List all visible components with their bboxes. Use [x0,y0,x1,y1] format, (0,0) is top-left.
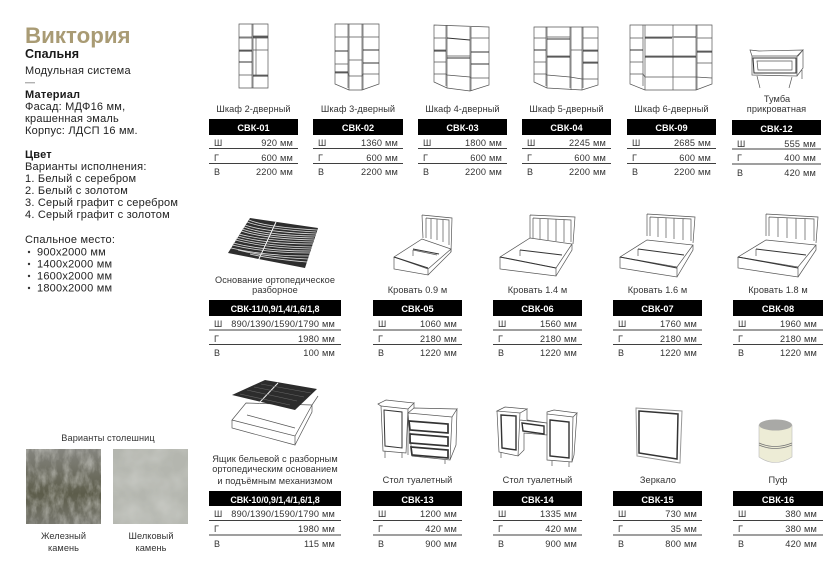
spec table: 1220 мм [420,348,457,358]
spec table: СВК-07 [641,304,674,314]
spec table: В [423,167,429,177]
spec table [613,300,702,358]
spec table: 420 мм [784,168,816,178]
caption: Кровать 1.6 м [628,285,687,295]
caption: Шкаф 5-дверный [529,104,604,114]
spec table: Ш [738,509,746,519]
product: wardrobe 3-door [313,24,403,177]
colour block: Цвет [25,149,52,161]
spec table [522,119,611,177]
spec table: Г [214,334,219,344]
product: orthopedic base: разборное [252,285,298,295]
spec table: 2180 мм [780,334,817,344]
spec table: В [498,348,504,358]
spec table: 2685 мм [674,138,711,148]
spec table: 1980 мм [298,524,335,534]
drawing: wardrobe 6-door [630,25,712,90]
material block: Корпус: ЛДСП 16 мм. [25,125,138,137]
drawing: mirror [636,408,682,463]
spec table: 600 мм [366,153,398,163]
product: storage box with lift mechanism [209,380,341,549]
sleeping place list: 1800x2000 мм [37,282,112,294]
spec table [733,300,823,358]
spec table: В [378,539,384,549]
product: wardrobe 2-door [209,24,298,177]
spec table: СВК-14 [521,495,554,505]
spec table: Ш [214,319,222,329]
spec table: 400 мм [784,153,816,163]
spec table: Г [423,153,428,163]
sleeping place list: 900x2000 мм [37,246,106,258]
spec table [732,120,821,178]
drawing: bed 1.8 [738,214,818,277]
spec table: Г [527,153,532,163]
spec table: Г [498,524,503,534]
caption: Стол туалетный [503,475,572,485]
swatch: iron stone [26,449,101,553]
spec table: Г [737,153,742,163]
spec table: Ш [378,319,386,329]
spec table [373,300,462,358]
spec table [627,119,716,177]
spec table: СВК-12 [760,124,793,134]
system type: Модульная система [25,65,131,77]
spec table: Ш [214,509,222,519]
product: bed 1.6 m [613,214,702,358]
spec table: СВК-03 [446,123,479,133]
drawing: pouf [759,420,792,462]
spec table: В [214,539,220,549]
sleeping place list: 1600x2000 мм [37,270,112,282]
spec table: Ш [618,509,626,519]
material block: Материал [25,89,80,101]
drawing: wardrobe 3-door [335,24,379,90]
colour block: 3. Серый графит с серебром [25,197,178,209]
spec table: В [632,167,638,177]
spec table: В [527,167,533,177]
sleeping place list [25,234,115,294]
spec table: СВК-10/0,9/1,4/1,6/1,8 [230,495,320,505]
spec table: Г [738,334,743,344]
spec table: 600 мм [470,153,502,163]
spec table: 1060 мм [420,319,457,329]
spec table: В [214,348,220,358]
product: bed 0.9 m [373,215,462,358]
spec table: В [738,348,744,358]
spec table: СВК-04 [550,123,583,133]
panel: tabletop variants [26,433,188,553]
spec table: 730 мм [665,509,697,519]
spec table: 420 мм [545,524,577,534]
swatch: iron stone: камень [48,543,79,553]
caption: Основание ортопедическое [215,275,335,285]
spec table: 1220 мм [780,348,817,358]
spec table: Ш [214,138,222,148]
caption: Шкаф 6-дверный [634,104,709,114]
spec table [209,491,341,549]
spec table [313,119,403,177]
colour block: 1. Белый с серебром [25,173,136,185]
spec table: 920 мм [261,138,293,148]
caption: Ящик бельевой с разборным [212,454,338,464]
spec table: 2180 мм [660,334,697,344]
spec table: 2200 мм [569,167,606,177]
product: bed 1.4 m [493,215,582,358]
caption: Шкаф 2-дверный [216,104,291,114]
product: bedside table [732,50,821,178]
material block: Фасад: МДФ16 мм, [25,101,125,113]
caption: Тумба [764,94,791,104]
spec table: Ш [618,319,626,329]
spec table [493,491,582,549]
spec table: Ш [498,319,506,329]
subtitle: Спальня [25,47,79,61]
drawing: bed 1.6 [620,214,695,277]
spec table: 2200 мм [361,167,398,177]
spec table: 600 мм [261,153,293,163]
swatch: silk stone: камень [135,543,167,553]
spec table: Ш [378,509,386,519]
spec table: 1980 мм [298,334,335,344]
product: bedside table: прикроватная [747,104,806,114]
spec table: 420 мм [785,539,817,549]
drawing: storage box [232,380,318,445]
spec table: Г [498,334,503,344]
caption: Кровать 1.4 м [508,285,567,295]
spec table: Г [214,153,219,163]
spec table [373,491,462,549]
spec table: 1960 мм [780,319,817,329]
product: pouf [733,420,823,549]
product: storage box with lift mechanism: и подъёмным механизмом [217,476,333,486]
spec table: Ш [738,319,746,329]
spec table: СВК-15 [641,495,674,505]
product: dressing table 14 [493,407,582,549]
spec table: 2200 мм [465,167,502,177]
spec table: Ш [423,138,431,148]
spec table: 420 мм [425,524,457,534]
spec table: 380 мм [785,524,817,534]
colour block [25,149,178,221]
sleeping place list: 1400x2000 мм [37,258,112,270]
spec table: В [737,168,743,178]
drawing: bedside table [750,50,803,88]
spec table: 890/1390/1590/1790 мм [231,509,335,519]
spec table: 2180 мм [420,334,457,344]
title: Виктория [25,23,131,48]
spec table: СВК-05 [401,304,434,314]
drawing: bed 1.4 [500,215,575,276]
drawing: bed 0.9 [394,215,452,275]
sidebar: collection description [25,23,178,294]
spec table: СВК-08 [762,304,794,314]
colour block: 4. Серый графит с золотом [25,209,170,221]
spec table: 100 мм [303,348,335,358]
spec table: Г [738,524,743,534]
product: dressing table 13 [373,400,462,549]
spec table: 555 мм [784,139,816,149]
spec table: 1800 мм [465,138,502,148]
spec table: Г [318,153,323,163]
spec table: СВК-11/0,9/1,4/1,6/1,8 [231,304,320,314]
drawing: wardrobe 2-door [239,24,268,88]
swatch: silk stone [113,449,188,553]
spec table [493,300,582,358]
product: storage box with lift mechanism: ортопедическим основанием [212,464,338,474]
spec table: СВК-02 [342,123,374,133]
tabletop heading: Варианты столешниц [61,433,155,443]
spec table: СВК-06 [521,304,554,314]
drawing: wardrobe 4-door [434,25,489,91]
product: wardrobe 5-door [522,27,611,177]
spec table: СВК-01 [237,123,270,133]
spec table: 1560 мм [540,319,577,329]
spec table: В [214,167,220,177]
spec table: 890/1390/1590/1790 мм [231,319,335,329]
spec table: Ш [498,509,506,519]
spec table: 2200 мм [674,167,711,177]
spec table: В [618,348,624,358]
colour block: Варианты исполнения: [25,161,147,173]
spec table [209,119,298,177]
spec table: 1200 мм [420,509,457,519]
spec table: В [378,348,384,358]
material block [25,89,138,137]
spec table: 380 мм [785,509,817,519]
colour block: 2. Белый с золотом [25,185,128,197]
spec table: Г [618,334,623,344]
caption: Шкаф 4-дверный [425,104,500,114]
spec table: Ш [632,138,640,148]
spec table: 2200 мм [256,167,293,177]
spec table: СВК-09 [655,123,688,133]
product: wardrobe 6-door [627,25,716,177]
caption: Пуф [769,475,788,485]
swatch: silk stone: Шелковый [128,531,174,541]
spec table: Г [378,334,383,344]
spec table: 900 мм [425,539,457,549]
product: mirror [613,408,702,549]
material block: крашенная эмаль [25,113,119,125]
caption: Шкаф 3-дверный [321,104,395,114]
spec table: 2180 мм [540,334,577,344]
spec table: 115 мм [304,539,335,549]
spec table: 1760 мм [660,319,697,329]
spec table: В [618,539,624,549]
spec table: 1220 мм [660,348,697,358]
spec table [733,491,823,549]
sleeping place list: Спальное место: [25,234,115,246]
caption: Стол туалетный [383,475,452,485]
product: bed 1.8 m [733,214,823,358]
spec table: СВК-13 [401,495,434,505]
spec table: 800 мм [665,539,697,549]
drawing: dressing table 13 [378,400,457,464]
spec table [418,119,507,177]
drawing: slatted base [228,218,318,268]
spec table [209,300,341,358]
spec table: 1335 мм [540,509,577,519]
product: orthopedic base [209,218,341,358]
spec table: 600 мм [679,153,711,163]
spec table: Ш [318,138,326,148]
spec table: 900 мм [545,539,577,549]
spec table: 1220 мм [540,348,577,358]
spec table: СВК-16 [762,495,794,505]
spec table: Ш [737,139,745,149]
spec table: 35 мм [671,524,697,534]
spec table: Г [378,524,383,534]
spec table: В [498,539,504,549]
spec table [613,491,702,549]
spec table: В [318,167,324,177]
spec table: В [738,539,744,549]
drawing: dressing table 14 [497,407,577,467]
spec table: 2245 мм [569,138,606,148]
spec table: 1360 мм [361,138,398,148]
drawing: wardrobe 5-door [534,27,598,90]
product: wardrobe 4-door [418,25,507,177]
spec table: Ш [527,138,535,148]
caption: Кровать 0.9 м [388,285,447,295]
caption: Кровать 1.8 м [748,285,808,295]
spec table: 600 мм [574,153,606,163]
caption: Зеркало [640,475,676,485]
spec table: Г [632,153,637,163]
swatch: iron stone: Железный [41,531,86,541]
spec table: Г [214,524,219,534]
spec table: Г [618,524,623,534]
